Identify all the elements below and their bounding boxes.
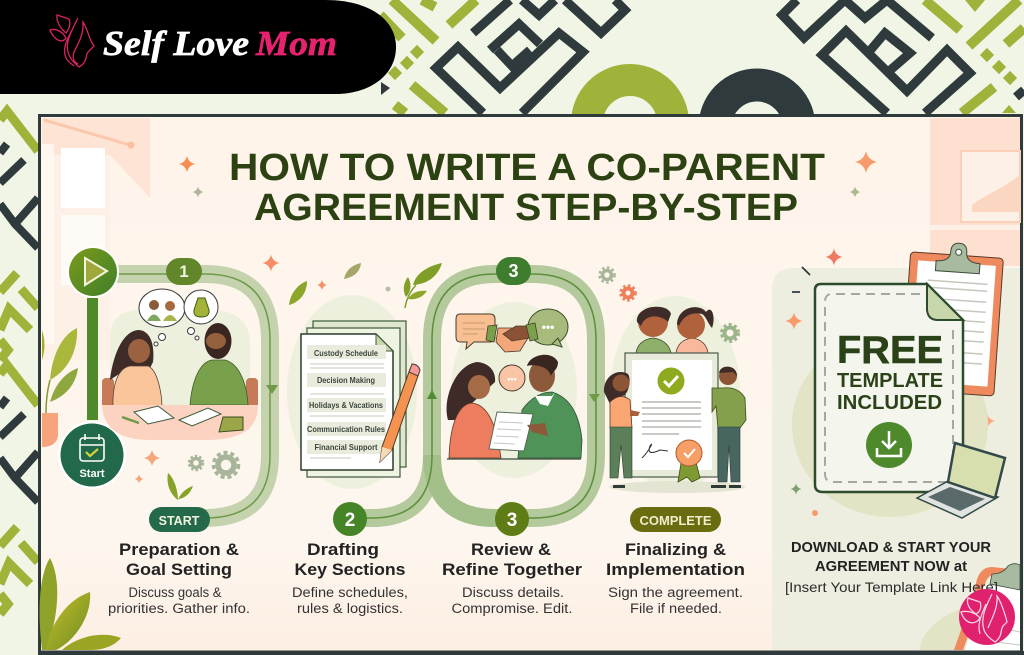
step 3 text: [442, 540, 582, 616]
illustration: preparation couple at table: [102, 289, 258, 440]
children: [636, 338, 671, 353]
arrow: step 3 down: [589, 394, 600, 402]
brand name: Mom: [255, 24, 337, 63]
background pattern: top maze: [380, 0, 1024, 113]
title: [229, 147, 825, 229]
room background: picture right: [930, 118, 1020, 266]
icon: clipboard: [901, 240, 1004, 396]
icon: brand face and leaves: [50, 15, 94, 67]
badge: complete: COMPLETE: [640, 514, 712, 528]
illustration: document stack: [287, 295, 420, 489]
free template label: [837, 329, 943, 414]
illustration: review couple with handshake: •••: [507, 374, 517, 384]
step 2 text: Key Sections: [294, 560, 406, 579]
step 3 text: Compromise. Edit.: [452, 601, 572, 616]
step 1 text: priorities. Gather info.: [108, 601, 250, 616]
arrow: step 2 up: [427, 390, 437, 399]
plant leaves bottom left: [40, 558, 121, 650]
decorative half rings: [587, 80, 799, 169]
illustration: review couple with handshake: [447, 302, 582, 478]
free template label: FREE: [837, 329, 943, 372]
step 4 text: Implementation: [606, 560, 745, 579]
badge: start: START: [159, 514, 200, 528]
arrow: step 1 down: [266, 385, 278, 394]
step 2 text: [292, 540, 408, 616]
panel: main infographic: [38, 116, 1024, 655]
download call to action: AGREEMENT NOW at: [815, 558, 967, 575]
connector: start bar: [87, 298, 98, 420]
badge: step 3 top: 3: [508, 261, 519, 281]
illustration: document stack: Decision Making: [317, 375, 375, 385]
illustration: review couple with handshake: •••: [542, 320, 554, 334]
icon: download: [866, 422, 912, 468]
chairs: [102, 378, 114, 408]
badge: step 2: 2: [345, 510, 355, 531]
icons: gears step 1: [189, 452, 238, 478]
icon: start calendar: Start: [79, 468, 105, 480]
step 2 text: Define schedules,: [292, 585, 408, 600]
step 3 text: Refine Together: [442, 560, 582, 579]
badge: step 3 top: [496, 257, 531, 285]
section rows: [307, 345, 386, 458]
held paper: [489, 412, 533, 451]
icon: sprout: [167, 473, 193, 500]
man: [190, 360, 248, 405]
badge: complete: [630, 507, 721, 532]
brand banner: [0, 0, 396, 94]
step 1 text: Goal Setting: [126, 560, 232, 579]
badge: step 3 bottom: 3: [507, 510, 517, 531]
papers on table: [134, 406, 174, 424]
lower right clipboard and blob: [919, 564, 1020, 650]
speech bubbles: [456, 314, 495, 349]
free template sheet: [815, 284, 963, 492]
man right: [712, 388, 746, 428]
panel: free template: [792, 240, 1005, 518]
download call to action: DOWNLOAD & START YOUR: [791, 539, 991, 556]
brand name: Self Love: [103, 24, 249, 63]
icon: play button: [67, 246, 119, 298]
step 2 text: rules & logistics.: [297, 601, 403, 616]
free template label: TEMPLATE: [837, 369, 943, 392]
step 4 text: Finalizing &: [625, 540, 726, 559]
brand name: [103, 24, 337, 63]
flow path: step 2 to 3 ribbon: [350, 274, 596, 518]
man: [518, 392, 582, 458]
woman: [447, 362, 495, 420]
title: HOW TO WRITE A CO-PARENT: [229, 147, 825, 189]
step 4 text: Sign the agreement.: [608, 585, 743, 600]
icon: laptop: [917, 443, 1005, 518]
badge: step 3 bottom: [495, 502, 529, 536]
step 4 text: File if needed.: [630, 601, 722, 616]
icon: brand badge: [959, 589, 1015, 645]
panel: free template card background: [772, 268, 1020, 650]
certificate: [625, 353, 718, 477]
illustration: family with signed agreement: [604, 296, 746, 493]
illustration: document stack: Financial Support: [314, 442, 378, 452]
step 1 text: Preparation &: [119, 540, 239, 559]
background pattern: left strip: [0, 111, 38, 614]
icon: handshake: [486, 323, 538, 352]
icons: gears step 4: [600, 268, 738, 342]
step 1 text: Discuss goals &: [128, 585, 222, 600]
step 1 text: [108, 540, 250, 616]
sparkles: [134, 151, 995, 516]
icon: start calendar: [58, 421, 126, 489]
step 3 text: Discuss details.: [462, 585, 564, 600]
woman left: [604, 372, 630, 404]
woman: [110, 330, 153, 380]
room background: window left: [42, 118, 150, 360]
free template label: INCLUDED: [837, 391, 942, 414]
badge: step 1: [166, 258, 202, 285]
step 4 text: [606, 540, 745, 616]
illustration: document stack: Communication Rules: [307, 424, 385, 434]
illustration: document stack: Custody Schedule: [314, 348, 378, 358]
step 3 text: Review &: [471, 540, 551, 559]
illustration: document stack: Holidays & Vacations: [309, 400, 383, 410]
step 2 text: Drafting: [307, 540, 379, 559]
flow path: step 1 ribbon: [93, 274, 270, 518]
badge: step 2: [333, 502, 367, 536]
decorative leaves: [289, 263, 442, 308]
download call to action: [Insert Your Template Link Here]: [785, 579, 998, 595]
icon: pencil: [380, 364, 420, 462]
badge: start: [149, 507, 210, 532]
title: AGREEMENT STEP-BY-STEP: [254, 187, 798, 229]
house plant with pot: [42, 328, 78, 447]
thought bubbles: [139, 289, 218, 346]
download call to action: [785, 539, 998, 595]
badge: step 1: 1: [179, 262, 189, 281]
table: [102, 405, 258, 440]
